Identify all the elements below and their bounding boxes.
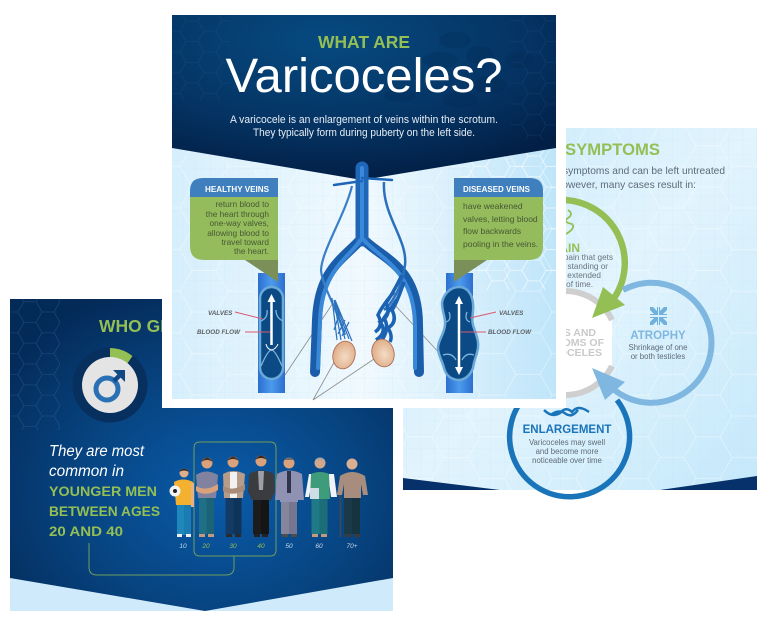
diseased label pointers <box>461 312 496 332</box>
callout: diseased veins: valves, letting blood <box>463 214 538 224</box>
light bottom band <box>10 578 393 611</box>
diseased vein diagram <box>438 273 478 393</box>
callout: diseased veins: flow backwards <box>463 226 521 236</box>
thin left vein <box>321 186 352 335</box>
anatomy illustration <box>285 168 443 400</box>
figure: age 70+ man with cane <box>337 458 368 537</box>
callout: healthy veins: HEALTHY VEINS <box>205 184 269 194</box>
enlargement text: Varicoceles may swell <box>529 438 605 447</box>
heading: what are: WHAT ARE <box>318 32 410 52</box>
text: most common in younger men: 20 AND 40 <box>49 523 123 539</box>
leader lines <box>285 303 443 400</box>
right testicle <box>369 337 397 369</box>
hexagon pattern <box>172 140 556 399</box>
healthy label pointers <box>235 312 270 332</box>
diseased labels: VALVES <box>499 310 524 317</box>
healthy labels: BLOOD FLOW <box>197 329 241 336</box>
intro text <box>557 166 725 191</box>
enlargement text <box>523 424 611 465</box>
age labels: 50 <box>285 543 293 550</box>
background pattern <box>403 128 757 490</box>
healthy labels <box>197 310 241 336</box>
age labels: 70+ <box>346 543 358 550</box>
pain text: periods of time. <box>537 280 593 289</box>
figure: age 10 boy <box>170 468 194 537</box>
center ring text: SYMPTOMS OF <box>527 337 605 349</box>
pain text: Dull pain that gets <box>547 253 613 262</box>
atrophy text: or both testicles <box>631 352 685 361</box>
text: most common in younger men: YOUNGER MEN <box>49 483 157 499</box>
healthy labels: VALVES <box>208 310 233 317</box>
heading: who gets: WHO GETS THEM? <box>99 316 259 336</box>
callout: diseased veins: DISEASED VEINS <box>463 184 530 194</box>
panel: who gets varicoceles <box>10 299 393 611</box>
trunk <box>356 168 368 240</box>
figure: age 50 man with tie <box>275 458 304 537</box>
pain text: PAIN <box>552 241 580 255</box>
center ring text <box>527 327 605 359</box>
center gray ring <box>513 291 612 395</box>
age labels: 60 <box>315 543 323 550</box>
diseased labels: BLOOD FLOW <box>488 329 532 336</box>
age labels: 40 <box>257 543 265 550</box>
intro paragraph <box>230 114 498 139</box>
header hexagons <box>172 15 556 140</box>
small hexagons right <box>460 148 556 290</box>
atrophy text: Shrinkage of one <box>629 343 687 352</box>
thin right vein <box>384 182 405 310</box>
callout: diseased veins: have weakened <box>463 201 523 211</box>
main veins <box>315 238 419 372</box>
left testicle <box>330 339 358 371</box>
grid pattern <box>172 140 556 399</box>
intro paragraph: A varicocele is an enlargement of veins within the scrotum. <box>230 114 498 126</box>
figure: age 40 man in suit <box>248 456 275 537</box>
side branches <box>334 178 392 185</box>
callout: healthy veins: travel toward <box>222 237 269 247</box>
text: most common in younger men: BETWEEN AGES <box>49 503 160 519</box>
callout: healthy veins <box>190 178 278 282</box>
callout: diseased veins <box>454 178 543 282</box>
intro text: however, many cases result in: <box>557 180 696 191</box>
enlargement text: noticeable over time <box>532 456 602 465</box>
age labels: 20 <box>201 543 210 550</box>
figure: age 30 man <box>223 456 245 537</box>
text: most common in younger men <box>49 443 160 539</box>
atrophy text <box>629 330 687 361</box>
green arc arrow: pain <box>560 200 625 318</box>
panel: main what are varicoceles <box>162 5 566 408</box>
enlargement text: ENLARGEMENT <box>523 424 611 436</box>
figure: age 60 man in vest <box>305 458 337 537</box>
left vein fan <box>332 298 352 341</box>
age labels: 30 <box>229 543 237 550</box>
callout: healthy veins: the heart through <box>206 209 269 219</box>
age highlight box and connector <box>89 442 276 575</box>
icon: atrophy arrows <box>650 307 667 325</box>
title: varicoceles: Varicoceles? <box>226 50 502 103</box>
pain text: worse when standing or <box>521 262 608 271</box>
trunk highlight <box>318 168 415 368</box>
right vein tangle <box>375 275 404 342</box>
dark bottom corners <box>403 476 757 490</box>
dark header <box>172 15 556 180</box>
age labels: 10 <box>179 543 187 550</box>
diseased labels <box>488 310 532 336</box>
intro paragraph: They typically form during puberty on the left side. <box>253 127 475 139</box>
enlargement text: and become more <box>536 447 598 456</box>
age labels <box>179 543 358 550</box>
panel: signs and symptoms <box>403 128 757 497</box>
callout: healthy veins: return blood to <box>215 199 269 209</box>
heading: symptoms: SYMPTOMS <box>565 140 660 159</box>
center ring text: SIGNS AND <box>538 327 596 339</box>
center ring text: VARICOCELES <box>527 347 602 359</box>
healthy vein diagram <box>258 273 285 393</box>
atrophy text: ATROPHY <box>630 330 686 342</box>
blue arc: enlargement <box>510 400 630 497</box>
icon: enlargement vein <box>544 408 589 415</box>
callout: healthy veins: the heart. <box>234 246 269 256</box>
callout: healthy veins: allowing blood to <box>207 228 269 238</box>
text: most common in younger men: They are most <box>49 443 145 460</box>
icon: male symbol donut <box>72 348 148 422</box>
callout: healthy veins: one-way valves, <box>210 218 269 228</box>
hexagon pattern <box>403 128 757 490</box>
figure: age 20 man <box>196 458 218 537</box>
text: most common in younger men: common in <box>49 463 124 480</box>
intro text: symptoms and can be left untreated <box>563 166 725 177</box>
hexagon texture <box>10 299 60 430</box>
blood cells texture <box>384 32 534 108</box>
pain text: after extended <box>549 271 601 280</box>
callout: diseased veins: pooling in the veins. <box>463 239 538 249</box>
blue arc arrow: atrophy <box>592 283 711 403</box>
pain text <box>521 241 613 289</box>
icon: pain <box>566 210 573 234</box>
